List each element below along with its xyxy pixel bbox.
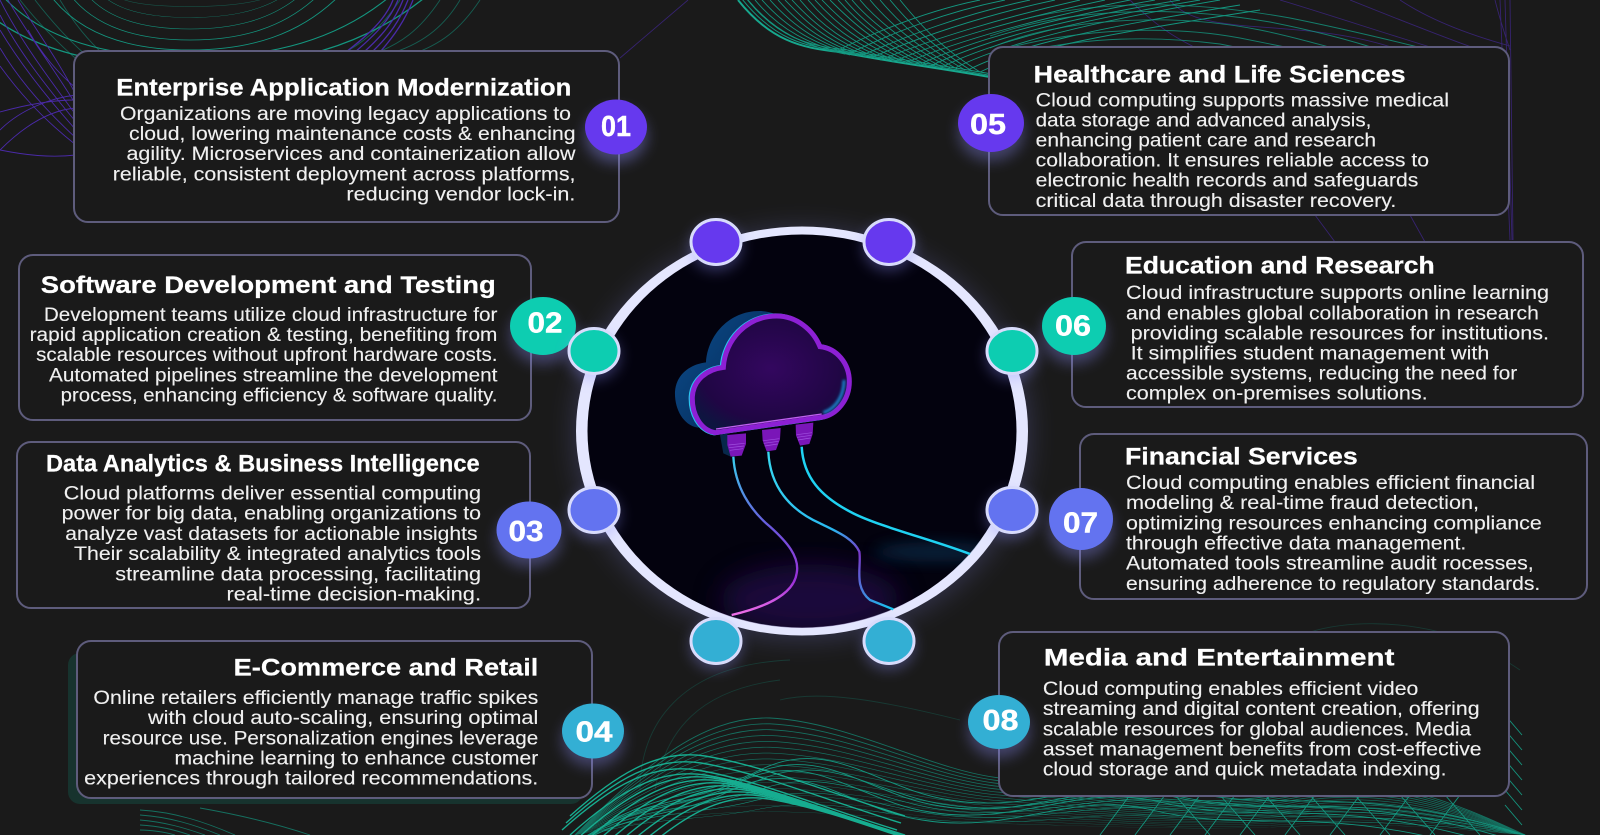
body text: data storage and advanced analysis, <box>1036 111 1371 132</box>
badge 05: 05 <box>970 109 1006 141</box>
node: lower right blue <box>986 488 1038 539</box>
badge 04 <box>562 704 624 767</box>
panel: 02 Software Development and Testing <box>19 255 531 420</box>
body text: complex on-premises solutions. <box>1126 384 1428 405</box>
heading: E-Commerce and Retail <box>234 655 538 682</box>
body text: critical data through disaster recovery. <box>1036 191 1396 212</box>
body text <box>1126 473 1542 595</box>
badge 01 <box>585 100 647 163</box>
panel: 08 Media and Entertainment <box>999 632 1509 796</box>
body text: agility. Microservices and containerization allow <box>126 144 576 165</box>
body text: providing scalable resources for institutions. <box>1131 323 1549 344</box>
body text <box>1036 90 1449 212</box>
node: bottom right cyan <box>863 618 915 670</box>
body text: machine learning to enhance customer <box>174 748 539 769</box>
node: bottom left cyan <box>690 618 742 670</box>
body text <box>30 305 498 407</box>
body text <box>1043 679 1482 781</box>
body text: streaming and digital content creation, offering <box>1043 699 1480 720</box>
body text: power for big data, enabling organizations to <box>62 504 481 525</box>
body text: Automated tools streamline audit rocesses, <box>1126 554 1534 575</box>
badge 03: 03 <box>508 516 544 548</box>
body text: optimizing resources enhancing compliance <box>1126 513 1542 534</box>
heading: Enterprise Application Modernization <box>116 75 571 102</box>
body text: through effective data management. <box>1126 534 1466 555</box>
panel: 01 Enterprise Application Modernization <box>74 51 619 222</box>
body text: rapid application creation & testing, benefiting from <box>30 325 497 346</box>
body text <box>113 104 576 206</box>
body text: and enables global collaboration in research <box>1126 303 1539 324</box>
heading: Media and Entertainment <box>1044 645 1394 672</box>
body text: Cloud infrastructure supports online learning <box>1126 283 1549 304</box>
body text: collaboration. It ensures reliable access to <box>1036 151 1429 172</box>
body text: analyze vast datasets for actionable insights <box>65 524 478 545</box>
body text: scalable resources for global audiences. Media <box>1043 719 1471 740</box>
body text <box>62 484 481 605</box>
body text: process, enhancing efficiency & software quality. <box>61 386 497 407</box>
body text: Online retailers efficiently manage traffic spikes <box>93 688 538 709</box>
body text: cloud storage and quick metadata indexing. <box>1043 760 1446 781</box>
panel: 05 Healthcare and Life Sciences <box>989 47 1509 215</box>
badge 02 <box>510 297 576 364</box>
badge 01: 01 <box>601 111 631 143</box>
badge 06 <box>1042 297 1106 364</box>
body text: reliable, consistent deployment across platforms, <box>113 164 576 186</box>
heading: Data Analytics & Business Intelligence <box>46 451 480 478</box>
badge 05 <box>958 94 1024 161</box>
body text: Cloud computing enables efficient video <box>1043 679 1418 700</box>
body text: electronic health records and safeguards <box>1036 171 1418 192</box>
panel: 04 E-Commerce and Retail <box>68 641 592 804</box>
body text: It simplifies student management with <box>1131 343 1489 364</box>
body text: accessible systems, reducing the need for <box>1126 364 1518 385</box>
body text: Development teams utilize cloud infrastructure for <box>44 305 498 326</box>
body text: ensuring adherence to regulatory standards. <box>1126 574 1540 595</box>
body text: Automated pipelines streamline the development <box>49 366 498 387</box>
body text: Cloud platforms deliver essential computing <box>64 484 481 504</box>
badge 07 <box>1049 488 1113 559</box>
body text: reducing vendor lock-in. <box>346 184 575 206</box>
body text: scalable resources without upfront hardware costs. <box>36 345 497 366</box>
body text: Cloud computing enables efficient financial <box>1126 473 1535 494</box>
body text: cloud, lowering maintenance costs & enhancing <box>129 124 576 145</box>
body text: Organizations are moving legacy applications to <box>120 104 571 125</box>
body text: resource use. Personalization engines leverage <box>103 728 538 749</box>
body text: streamline data processing, facilitating <box>115 564 481 585</box>
heading: Software Development and Testing <box>41 272 496 299</box>
body text <box>84 688 539 790</box>
panel: 06 Education and Research <box>1072 242 1583 407</box>
panel: 03 Data Analytics and Business Intelligence <box>17 442 530 608</box>
body text: real-time decision-making. <box>226 584 481 605</box>
body text <box>1126 283 1549 405</box>
body text: modeling & real-time fraud detection, <box>1126 493 1479 514</box>
body text: experiences through tailored recommendations. <box>84 769 538 790</box>
heading: Education and Research <box>1125 252 1435 279</box>
badge 04: 04 <box>576 717 613 749</box>
panel: 07 Financial Services <box>1080 434 1587 599</box>
node: mid left teal <box>568 328 620 380</box>
node: lower left blue <box>568 488 620 539</box>
badge 03 <box>496 502 562 567</box>
node: upper left purple <box>690 220 742 271</box>
body text: asset management benefits from cost-effective <box>1043 740 1482 761</box>
node: upper right purple <box>863 220 915 271</box>
badge 08 <box>968 695 1030 758</box>
heading: Healthcare and Life Sciences <box>1034 62 1406 89</box>
node: mid right teal <box>986 328 1038 380</box>
icon: cloud with cables <box>675 311 970 615</box>
body text: Their scalability & integrated analytics tools <box>74 544 481 565</box>
badge 07: 07 <box>1063 508 1098 540</box>
central ring with cloud illustration <box>576 226 1028 638</box>
badge 02: 02 <box>528 308 562 340</box>
body text: enhancing patient care and research <box>1036 131 1376 152</box>
body text: Cloud computing supports massive medical <box>1036 90 1449 111</box>
heading: Financial Services <box>1125 443 1358 470</box>
body text: with cloud auto-scaling, ensuring optimal <box>147 708 538 729</box>
badge 08: 08 <box>982 705 1018 737</box>
badge 06: 06 <box>1055 311 1091 343</box>
